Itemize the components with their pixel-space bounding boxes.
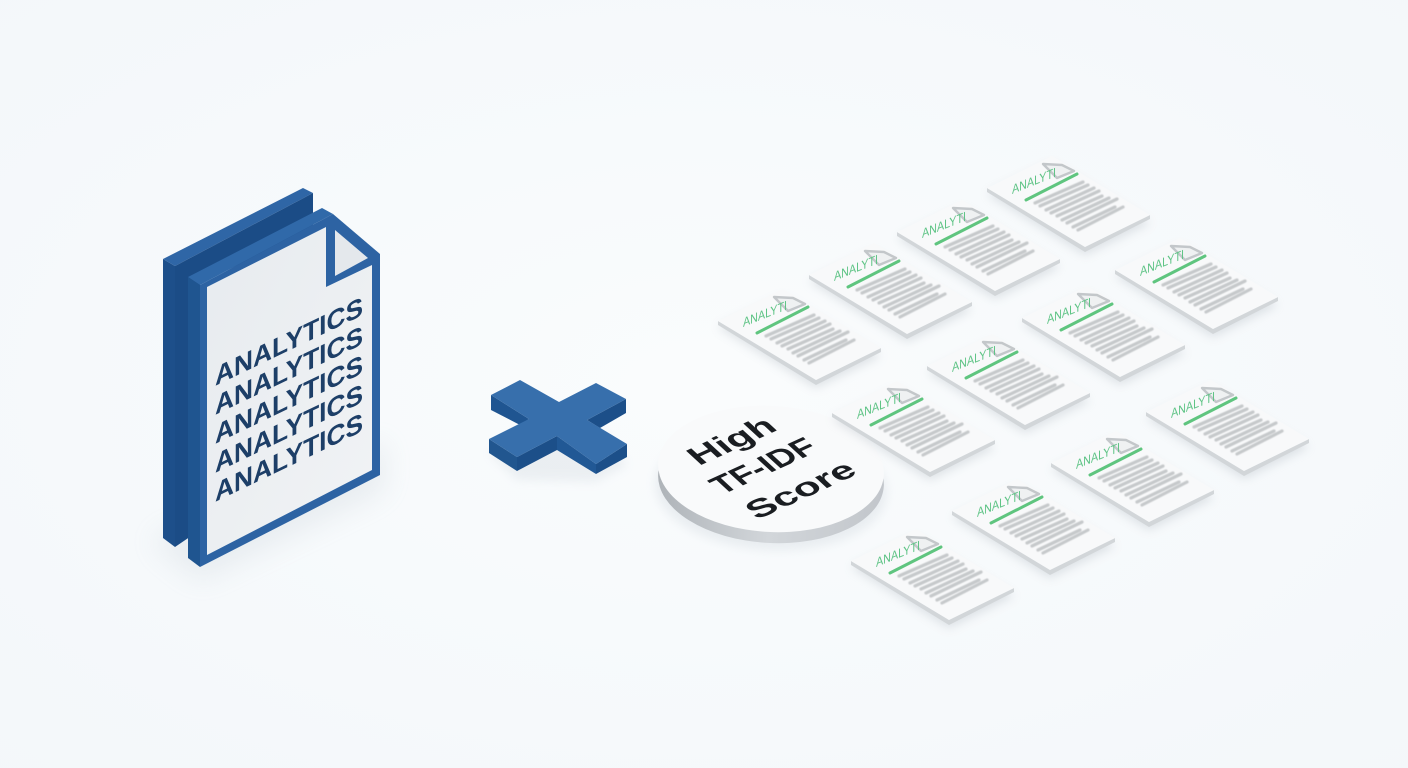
document card 10: ANALYTI <box>1076 440 1120 472</box>
document card 4: ANALYTI <box>1012 165 1056 197</box>
document card 5: ANALYTI <box>1140 247 1184 279</box>
document card 8 <box>832 381 995 480</box>
repeated word ANALYTICS <box>215 291 363 509</box>
document card 10 <box>1051 431 1214 530</box>
repeated word ANALYTICS: ANALYTICS <box>215 407 363 509</box>
document card 12: ANALYTI <box>876 538 920 570</box>
document card 11 <box>952 479 1115 578</box>
document card 3: ANALYTI <box>922 209 966 241</box>
document card 7: ANALYTI <box>952 343 996 375</box>
document card 6: ANALYTI <box>1047 295 1091 327</box>
repeated word ANALYTICS: ANALYTICS <box>215 349 363 451</box>
repeated word ANALYTICS: ANALYTICS <box>215 378 363 480</box>
badge label: High <box>680 412 784 471</box>
document card 9: ANALYTI <box>1171 389 1215 421</box>
page fold <box>335 230 368 276</box>
icon: multiply sign <box>489 380 627 482</box>
document card 2: ANALYTI <box>834 252 878 284</box>
document card 9 <box>1146 380 1309 479</box>
badge label: TF-IDF <box>703 433 825 500</box>
front document <box>188 208 380 567</box>
document card 7 <box>927 334 1090 433</box>
document card 12 <box>851 529 1014 628</box>
document card 3 <box>897 200 1060 299</box>
document card 2 <box>809 243 972 342</box>
document card 8: ANALYTI <box>857 390 901 422</box>
document card 1: ANALYTI <box>743 298 787 330</box>
badge label <box>680 412 864 525</box>
document card 5 <box>1115 238 1278 337</box>
document card 11: ANALYTI <box>977 488 1021 520</box>
document card 6 <box>1022 286 1185 385</box>
repeated word ANALYTICS: ANALYTICS <box>215 320 363 422</box>
document card 1 <box>718 289 881 388</box>
badge label: Score <box>738 456 864 525</box>
repeated word ANALYTICS: ANALYTICS <box>215 291 363 393</box>
document card 4 <box>987 156 1150 255</box>
icon: stacked document with repeated term <box>150 188 385 580</box>
badge: High TF-IDF Score disc <box>652 400 890 556</box>
back document <box>163 188 313 547</box>
